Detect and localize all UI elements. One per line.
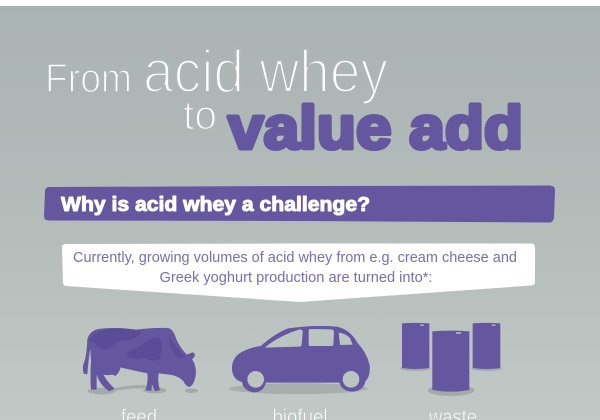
car windows and wheel hubs xyxy=(247,329,359,388)
center barrel xyxy=(432,331,469,392)
cow patches xyxy=(89,328,185,361)
cow body xyxy=(83,328,196,391)
title: to: to xyxy=(183,92,217,138)
callout text: Currently, growing volumes of acid whey from e.g. cream cheese and xyxy=(73,250,517,266)
icon: car xyxy=(229,326,370,394)
callout xyxy=(62,244,535,302)
car body xyxy=(232,326,370,392)
left barrel xyxy=(402,323,429,369)
car shadow xyxy=(229,383,368,394)
heading text: Why is acid whey a challenge? xyxy=(61,194,370,216)
heading background xyxy=(44,186,555,222)
barrel shadows xyxy=(400,366,502,396)
title: value add: value add xyxy=(228,94,523,162)
callout bubble xyxy=(62,244,535,302)
right barrel xyxy=(473,323,500,369)
title: acid whey: acid whey xyxy=(143,38,388,105)
cow shadow xyxy=(88,385,198,394)
callout text: Greek yoghurt production are turned into*: xyxy=(160,270,432,286)
title: From: From xyxy=(45,55,132,101)
icon: cow xyxy=(83,328,198,394)
icon: barrels xyxy=(400,323,502,396)
section heading bar xyxy=(44,186,555,222)
title xyxy=(45,38,523,162)
barrel caps xyxy=(420,325,496,334)
